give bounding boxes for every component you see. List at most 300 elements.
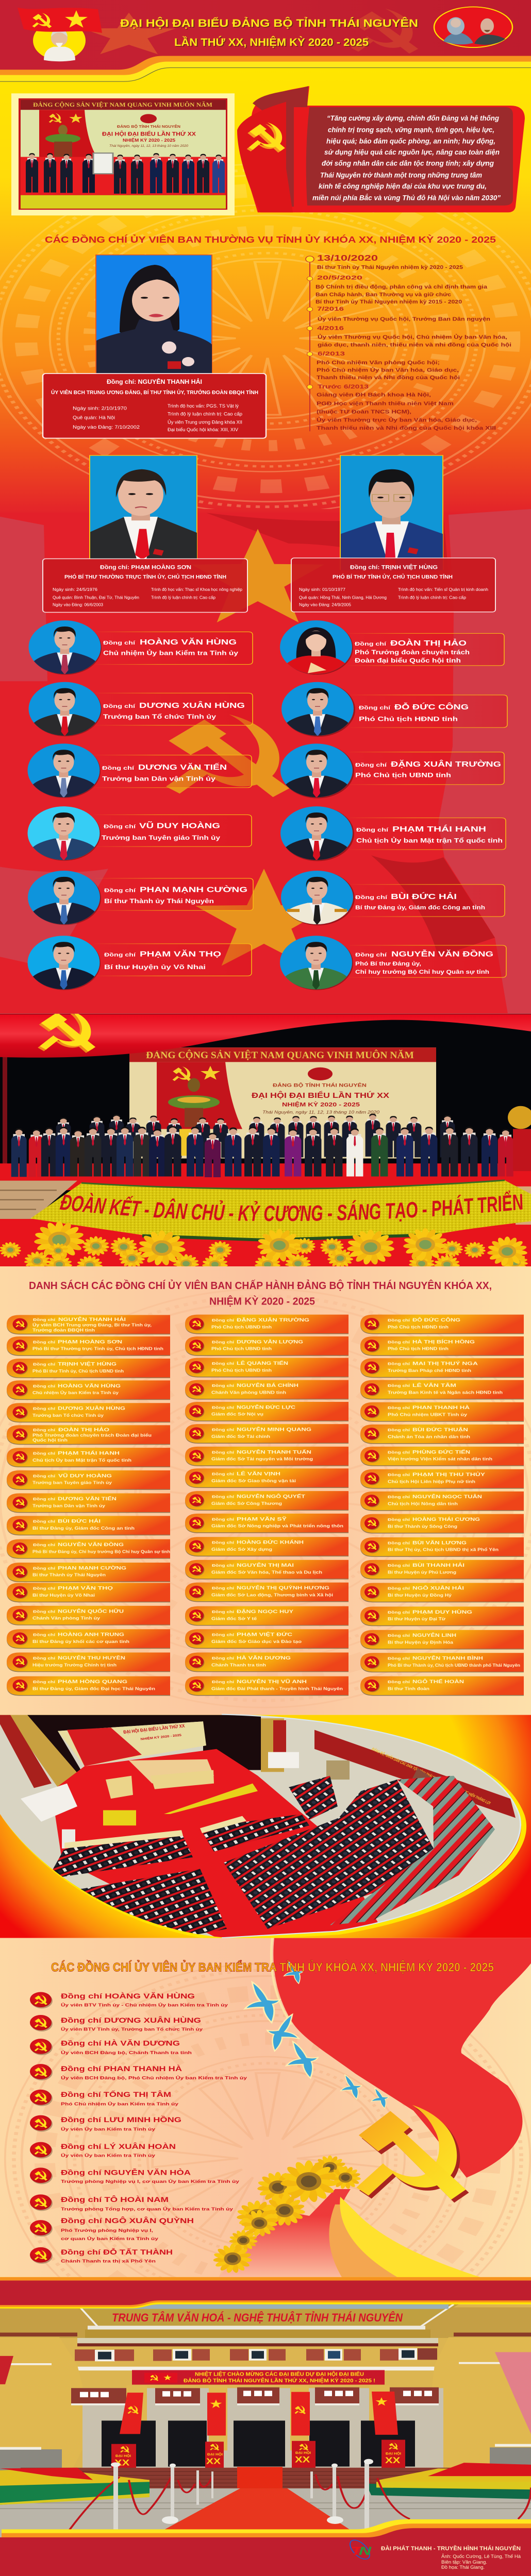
card: Pham Thai Hanh: PHẠM THÁI HANH: [58, 1450, 120, 1456]
card: Le Van Tam: LÊ VĂN TÂM: [412, 1383, 456, 1388]
welcome banner: ĐẢNG BỘ TỈNH THÁI NGUYÊN LẦN THỨ XX, NHIỆM KỲ 2020 - 2025 !: [184, 2378, 375, 2384]
card: Duong Xuan Hung: [7, 1403, 170, 1422]
decoration: sunflowers: [213, 2156, 361, 2273]
decoration: red drape: [273, 1938, 531, 2178]
column 1: [7, 1315, 170, 1696]
card: Pham Van Sy: Giám đốc Sở Nông nghiệp và Phát triển nông thôn: [211, 1524, 343, 1528]
heading: executive committee: [29, 1279, 492, 1307]
icon: station logo: [346, 2538, 374, 2562]
card: Pham Viet Duc: [185, 1629, 349, 1649]
column banners "Dai hoi XX": XX: [206, 2456, 221, 2466]
profile card: Trinh Viet Hung: [291, 558, 495, 612]
card: Nguyen Thanh Binh: NGUYỄN THANH BÌNH: [412, 1655, 483, 1661]
member: Duong Van Tien: Đồng chí: [102, 765, 135, 771]
card: Duong Van Luong: Đồng chí: [212, 1340, 235, 1344]
card: Pham Thi Thu Thuy: Đồng chí: [388, 1472, 410, 1477]
member: Nguyen Van Hoa: Trưởng phòng Nghiệp vụ I, cơ quan Ủy ban Kiểm tra Tỉnh ủy: [61, 2179, 239, 2184]
card: Nguyen Thi Quynh Huong: NGUYỄN THỊ QUỲNH HƯƠNG: [237, 1585, 329, 1591]
member: Nguyen Van Hoa: [30, 2167, 239, 2184]
card: Pham Van Sy: PHẠM VĂN SỸ: [237, 1516, 287, 1522]
card: Pham Thai Hanh: Chủ tịch Ủy ban Mặt trận Tổ quốc tỉnh: [32, 1458, 131, 1463]
card: Phan Thanh Ha: [360, 1402, 524, 1422]
card: Trinh Viet Hung: TRỊNH VIỆT HÙNG: [58, 1361, 117, 1367]
card: Hoang Van Hung: Đồng chí: [33, 1384, 56, 1388]
member: Doan Thi Hao: Đồng chí: [355, 641, 387, 647]
card: Phan Manh Cuong: Đồng chí: [33, 1566, 56, 1570]
profile card: Nguyen Thanh Hai: Trình độ lý luận chính trị: Cao cấp: [168, 412, 242, 417]
card: Nguyen Linh: NGUYỄN LINH: [412, 1633, 456, 1638]
card: Nguyen Thanh Tuan: [185, 1447, 349, 1466]
member: Do Duc Cong: ĐỖ ĐỨC CÔNG: [394, 702, 469, 711]
timeline: career of Nguyen Thanh Hai: Thanh thiếu niên và Nhi đồng của Quốc hội: [317, 375, 460, 381]
card: Pham Hoang Son: Đồng chí: [33, 1340, 56, 1344]
card: Nguyen Van Dong: NGUYỄN VĂN ĐỒNG: [58, 1542, 124, 1548]
card: Pham Hoang Son: PHẠM HOÀNG SƠN: [58, 1339, 122, 1345]
card: Nguyen Van Dong: [7, 1539, 170, 1559]
card: Nguyen Thanh Tuan: NGUYỄN THANH TUẤN: [237, 1449, 311, 1455]
card: Hoang Thai Cuong: [360, 1514, 524, 1534]
card: Bui Duc Hai: BÙI ĐỨC HẢI: [58, 1518, 101, 1524]
card: Nguyen Thu Huyen: [7, 1653, 170, 1672]
member: To Hoai Nam: Trưởng phòng Tổng hợp, cơ quan Ủy ban Kiểm tra Tỉnh ủy: [61, 2206, 233, 2212]
card: Nguyen Thanh Hai: [7, 1315, 170, 1334]
card: Bui Thanh Hai: [360, 1560, 524, 1580]
card: Nguyen Ba Chinh: [185, 1380, 349, 1400]
card: Mai Thi Thuy Nga: [360, 1358, 524, 1378]
title: congress name: LẦN THỨ XX, NHIỆM KỲ 2020 - 2025: [175, 36, 370, 49]
member: Bui Duc Hai: [280, 870, 505, 925]
card: Ngo The Hoan: Đồng chí: [388, 1680, 410, 1684]
member: Pham Thai Hanh: PHẠM THÁI HANH: [392, 824, 486, 834]
card: Bui Thanh Hai: BÙI THANH HẢI: [412, 1563, 464, 1568]
card: Nguyen Thi Mai: [185, 1560, 349, 1580]
card: Doan Thi Hao: ĐOÀN THỊ HẢO: [58, 1427, 110, 1433]
card: Nguyen Ngoc Tuan: Đồng chí: [388, 1495, 410, 1499]
tan column and red banner at left: [7, 1715, 98, 1797]
stage backdrop: ĐẢNG BỘ TỈNH THÁI NGUYÊN: [273, 1082, 367, 1088]
column shafts: [126, 2385, 390, 2450]
profile card: Nguyen Thanh Hai: Đồng chí: NGUYỄN THANH HẢI: [107, 378, 202, 385]
member: Duong Xuan Hung: Đồng chí DƯƠNG XUÂN HÙNG: [61, 2016, 201, 2024]
card: Dang Xuan Truong: ĐẶNG XUÂN TRƯỜNG: [237, 1317, 309, 1323]
card: Ha Thi Bich Hong: Phó Chủ tịch HĐND tỉnh: [388, 1347, 449, 1351]
card: Nguyen Linh: [360, 1630, 524, 1650]
card: Bui Duc Thuan: Đồng chí: [388, 1428, 410, 1432]
member: Do Duc Cong: Đồng chí: [359, 705, 391, 711]
stage backdrop: ĐẢNG CỘNG SẢN VIỆT NAM QUANG VINH MUÔN NĂM: [146, 1049, 414, 1060]
column banners "Dai hoi XX": ĐẠI HỘI: [295, 2451, 311, 2455]
timeline: career of Nguyen Thanh Hai: 4/2016: [317, 325, 344, 331]
member: Vu Duy Hoang: [27, 806, 252, 861]
red ribbon with hammer and sickle: [0, 1010, 531, 1058]
entrance doors: [102, 2420, 415, 2467]
timeline: career of Nguyen Thanh Hai: Ủy viên Thường trực Ủy ban Văn hóa, Giáo dục,: [317, 416, 477, 423]
card: Phung Duc Tien: Đồng chí: [388, 1450, 410, 1454]
panel: inspection committee: [0, 1938, 531, 2353]
profile card: Nguyen Thanh Hai: Ngày vào Đảng: 7/10/2002: [73, 425, 140, 430]
card: Phan Manh Cuong: [7, 1563, 170, 1582]
member: Duong Van Tien: [27, 743, 252, 798]
card: Hoang Van Hung: HOÀNG VĂN HÙNG: [58, 1383, 121, 1388]
portrait: Marx and Lenin medallion: [434, 7, 512, 47]
decoration: doves: [245, 1961, 389, 2108]
card: Duong Xuan Hung: Đồng chí: [33, 1406, 56, 1411]
card: Ha Thi Bich Hong: HÀ THỊ BÍCH HỒNG: [412, 1339, 475, 1345]
card: Mai Thi Thuy Nga: Trưởng Ban Pháp chế HĐND tỉnh: [388, 1368, 471, 1373]
panel: congress photo frame: [11, 93, 235, 215]
member: Hoang Van Hung: Đồng chí HOÀNG VĂN HÙNG: [61, 1992, 195, 2000]
card: Hoang Van Hung: Chủ nhiệm Ủy ban Kiểm tra Tỉnh ủy: [32, 1391, 119, 1395]
card: Nguyen Thanh Binh: [360, 1653, 524, 1672]
profile card: Nguyen Thanh Hai: Trình độ học vấn: PGS. TS Vật lý: [168, 404, 239, 409]
member: Phan Manh Cuong: Bí thư Thành ủy Thái Nguyên: [104, 897, 214, 905]
footer credits: Đồ họa: Thái Giang.: [441, 2565, 485, 2570]
timeline: career of Nguyen Thanh Hai: 7/2016: [317, 306, 344, 312]
profile card: Trinh Viet Hung: Đồng chí: TRỊNH VIỆT HÙNG: [350, 564, 438, 570]
card: Pham Van Tho: PHẠM VĂN THỌ: [58, 1585, 113, 1591]
card: Nguyen Thanh Hai: Đồng chí: [33, 1318, 56, 1322]
flower bed slogan: ĐOÀN KẾT - DÂN CHỦ - KỶ CƯƠNG - SÁNG TẠO - PHÁT TRIỂN: [59, 1190, 523, 1222]
member: Hoang Van Hung: [28, 620, 253, 675]
stage backdrop: Thái Nguyên, ngày 11, 12, 13 tháng 10 năm 2020: [262, 1110, 380, 1115]
red carpet: [157, 2467, 356, 2534]
welcome banner: NHIỆT LIỆT CHÀO MỪNG CÁC ĐẠI BIỂU DỰ ĐẠI HỘI ĐẠI BIỂU: [195, 2371, 364, 2377]
card: Nguyen Ngo Quyet: Đồng chí: [212, 1495, 235, 1499]
card: Nguyen Thi Mai: Đồng chí: [212, 1563, 235, 1568]
card: Phan Thanh Ha: Đồng chí: [388, 1405, 410, 1410]
profile card: Nguyen Thanh Hai: Ngày sinh: 2/10/1970: [73, 406, 127, 411]
icon: party flag with hammer sickle and star: [18, 8, 102, 33]
member: Duong Xuan Hung: Đồng chí: [103, 703, 136, 709]
card: Ha Van Duong: Đồng chí: [212, 1656, 235, 1660]
card: Pham Hong Quang: PHẠM HỒNG QUANG: [58, 1679, 127, 1685]
photo: congress hall from above in curved frame: NHIỆM KỲ 2020 - 2025: [140, 1733, 182, 1741]
decoration: hammer and sickle: [166, 715, 289, 797]
panel: executive committee list: [0, 1266, 531, 1715]
timeline: career of Nguyen Thanh Hai: Phó Chủ nhiệm Ủy ban Văn hóa, Giáo dục,: [317, 366, 459, 373]
timeline: career of Nguyen Thanh Hai: [306, 253, 511, 431]
card: Dang Ngoc Huy: ĐẶNG NGỌC HUY: [237, 1609, 294, 1615]
flower bed slogan: [30, 1179, 531, 1242]
decoration: faded star: [82, 13, 175, 54]
member: Bui Duc Hai: Bí thư Đảng ủy, Giám đốc Công an tỉnh: [355, 904, 485, 910]
photo: culture and arts centre building: [0, 2304, 531, 2538]
seating blocks: [47, 1836, 193, 1879]
card: Hoang Duc Khanh: HOÀNG ĐỨC KHÁNH: [237, 1539, 304, 1545]
sunflowers: [0, 1221, 528, 1275]
card: Nguyen Minh Quang: Giám đốc Sở Tài chính: [211, 1434, 270, 1439]
member: Duong Xuan Hung: [30, 2015, 203, 2032]
upper roof: [0, 2308, 531, 2338]
timeline: career of Nguyen Thanh Hai: Thanh thiếu niên và Nhi đồng của Quốc hội khóa XIII: [317, 425, 496, 431]
card: Doan Thi Hao: Đồng chí: [33, 1428, 56, 1432]
column banners "Dai hoi XX": XX: [385, 2456, 400, 2465]
panel: header banner: [0, 0, 531, 81]
card: Le Van Tam: Đồng chí: [388, 1383, 410, 1388]
card: Duong Xuan Hung: DƯƠNG XUÂN HÙNG: [58, 1405, 125, 1411]
member: Duong Van Tien: DƯƠNG VĂN TIẾN: [138, 762, 227, 771]
profile card: Nguyen Thanh Hai: Đại biểu Quốc hội khóa: XIII, XIV: [168, 428, 239, 433]
card: Nguyen Thanh Hai: NGUYỄN THANH HẢI: [58, 1317, 126, 1323]
member: Pham Van Tho: PHẠM VĂN THỌ: [140, 949, 221, 958]
member: Do Tat Thanh: [30, 2247, 173, 2264]
rope stanchions: [70, 2474, 531, 2530]
dark curtain top: [27, 1715, 261, 1799]
member: Phan Manh Cuong: PHAN MẠNH CƯỜNG: [140, 885, 247, 894]
timeline: career of Nguyen Thanh Hai: Ban Chấp hành, Ban Thường vụ và giữ chức: [316, 292, 451, 297]
red ground below flower bed: [0, 1219, 531, 1266]
card: Duong Xuan Hung: Trưởng ban Tổ chức Tỉnh ủy: [32, 1413, 104, 1418]
card: Dang Xuan Truong: Đồng chí: [212, 1318, 235, 1323]
timeline: career of Nguyen Thanh Hai: Ủy viên Thường vụ Quốc hội, Trưởng Ban Dân nguyện: [318, 315, 490, 322]
profile card: Pham Hoang Son: PHÓ BÍ THƯ THƯỜNG TRỰC TỈNH ỦY, CHỦ TỊCH HĐND TỈNH: [64, 573, 226, 580]
member: Ha Van Duong: [30, 2039, 192, 2055]
title: congress name: ĐẠI HỘI ĐẠI BIỂU ĐẢNG BỘ TỈNH THÁI NGUYÊN: [121, 17, 419, 30]
side pillars: [0, 2337, 531, 2480]
member: Bui Duc Hai: BÙI ĐỨC HẢI: [391, 892, 457, 901]
red stage floor: [0, 1163, 531, 1190]
card: Nguyen Ba Chinh: Đồng chí: [212, 1383, 235, 1388]
footer credits: Biên tập: Văn Giang.: [441, 2560, 487, 2565]
card: Nguyen Thi Vu Anh: [185, 1676, 349, 1696]
card: Nguyen Duc Luc: Đồng chí: [212, 1405, 235, 1410]
timeline: career of Nguyen Thanh Hai: Bí thư Tỉnh ủy Thái Nguyên nhiệm kỳ 2020 - 2025: [317, 264, 463, 270]
card: Nguyen Thanh Hai: Trưởng đoàn ĐBQH tỉnh: [32, 1328, 95, 1332]
member: Do Tat Thanh: Chánh Thanh tra thị xã Phổ Yên: [61, 2259, 156, 2264]
balconies: [71, 2387, 439, 2403]
timeline: career of Nguyen Thanh Hai: Bí thư Tỉnh ủy Thái Nguyên nhiệm kỳ 2015 - 2020: [316, 299, 462, 305]
card: Bui Van Luong: Bí thư Thị ủy, Chủ tịch UBND thị xã Phổ Yên: [388, 1548, 499, 1552]
member: Do Duc Cong: Phó Chủ tịch HĐND tỉnh: [359, 716, 458, 722]
card: Pham Thai Hanh: Đồng chí: [33, 1451, 56, 1455]
card: Pham Van Tho: Đồng chí: [33, 1586, 56, 1590]
member: Hoang Van Hung: [30, 1992, 228, 2008]
member: Nguyen Van Dong: Chỉ huy trưởng Bộ Chỉ huy Quân sự tỉnh: [355, 969, 489, 975]
card: Nguyen Thanh Tuan: Đồng chí: [212, 1450, 235, 1454]
upper wall panels and windows: [2, 2340, 531, 2361]
card: Nguyen Ngoc Tuan: [360, 1492, 524, 1511]
member: Dang Xuan Truong: Đồng chí: [355, 762, 387, 768]
member: Pham Van Tho: Đồng chí: [104, 952, 136, 958]
card: Dang Ngoc Huy: Đồng chí: [212, 1609, 235, 1614]
column banners "Dai hoi XX": ĐẠI HỘI: [115, 2454, 131, 2458]
card: Le Van Vinh: Giám đốc Sở Giao thông vận tải: [211, 1479, 296, 1483]
card: Duong Van Tien: Trưởng ban Dân vận Tỉnh ủy: [32, 1504, 106, 1508]
card: Le Quang Tien: LÊ QUANG TIẾN: [237, 1361, 288, 1366]
panel: congress photo frame: ĐẠI HỘI ĐẠI BIỂU LẦN THỨ XX: [102, 131, 196, 137]
stage backdrop: ĐẠI HỘI ĐẠI BIỂU LẦN THỨ XX: [252, 1091, 389, 1100]
card: Nguyen Ngoc Tuan: Chủ tịch Hội Nông dân tỉnh: [388, 1502, 458, 1506]
white band: [70, 2367, 443, 2370]
profile card: Trinh Viet Hung: Ngày vào Đảng: 24/9/2005: [299, 603, 351, 607]
stage backdrop: [129, 1047, 436, 1159]
member: Ngo Xuan Quynh: Phó Trưởng phòng Nghiệp vụ I,: [61, 2228, 153, 2233]
card: Nguyen Quoc Huu: Chánh Văn phòng Tỉnh ủy: [32, 1616, 101, 1620]
profile card: Trinh Viet Hung: Quê quán: Hồng Thái, Ninh Giang, Hải Dương: [299, 595, 387, 600]
panel: section divider above building: [0, 2277, 531, 2309]
welcome banner: [132, 2370, 385, 2385]
card: Pham Viet Duc: Giám đốc Sở Giáo dục và Đào tạo: [211, 1639, 302, 1644]
profile card: Nguyen Thanh Hai: Quê quán: Hà Nội: [73, 415, 115, 420]
member: Do Duc Cong: [280, 681, 507, 737]
member: Luu Minh Hong: Đồng chí LƯU MINH HỒNG: [61, 2115, 181, 2124]
quote panel: [306, 107, 513, 206]
member: Nguyen Van Dong: [279, 935, 506, 990]
card: Ha Thi Bich Hong: [360, 1336, 524, 1356]
card: Bui Duc Thuan: BÙI ĐỨC THUẬN: [412, 1427, 468, 1433]
profile card: Trinh Viet Hung: PHÓ BÍ THƯ TỈNH ỦY, CHỦ TỊCH UBND TỈNH: [333, 573, 453, 580]
member: Doan Thi Hao: ĐOÀN THỊ HẢO: [390, 638, 467, 648]
card: Nguyen Thi Vu Anh: Giám đốc Đài Phát thanh - Truyền hình Thái Nguyên: [211, 1687, 343, 1691]
card: Le Van Vinh: LÊ VĂN VỊNH: [237, 1471, 280, 1477]
card: Ngo Xuan Hai: Bí thư Huyện ủy Đồng Hỷ: [388, 1593, 452, 1598]
card: Pham Thi Thu Thuy: [360, 1469, 524, 1489]
card: Nguyen Thanh Hai: Ủy viên BCH Trung ương Đảng, Bí thư Tỉnh ủy,: [32, 1323, 152, 1327]
decoration: faded hammer and sickle: [351, 9, 418, 54]
heading: executive committee: NHIỆM KỲ 2020 - 2025: [209, 1295, 315, 1307]
member: Tong Thi Tam: Đồng chí TỐNG THỊ TÂM: [61, 2090, 171, 2098]
member: Doan Thi Hao: Phó Trưởng đoàn chuyên trách: [355, 649, 470, 656]
card: Mai Thi Thuy Nga: MAI THỊ THUÝ NGA: [412, 1361, 478, 1366]
card: Ha Van Duong: [185, 1653, 349, 1672]
member: Nguyen Van Dong: NGUYỄN VĂN ĐỒNG: [391, 949, 493, 958]
card: Phung Duc Tien: PHÙNG ĐỨC TIẾN: [412, 1449, 470, 1455]
card: Nguyen Duc Luc: [185, 1402, 349, 1421]
photo: delegates on stage with flower bed: [0, 1014, 531, 1266]
card: Ngo The Hoan: Bí thư Tỉnh đoàn: [388, 1687, 429, 1691]
card: Nguyen Thi Mai: Giám đốc Sở Văn hóa, Thể thao và Du lịch: [211, 1570, 322, 1574]
card: Nguyen Van Dong: Đồng chí: [33, 1543, 56, 1547]
icon: station logo: N: [359, 2545, 372, 2557]
card: Bui Van Luong: [360, 1537, 524, 1557]
card: Vu Duy Hoang: VŨ DUY HOÀNG: [58, 1473, 112, 1479]
card: Vu Duy Hoang: Đồng chí: [33, 1474, 56, 1478]
card: Hoang Duc Khanh: [185, 1537, 349, 1556]
member: Luu Minh Hong: Ủy viên Ủy ban Kiểm tra Tỉnh ủy: [61, 2126, 155, 2132]
member: Pham Thai Hanh: Đồng chí: [356, 827, 389, 833]
card: Ngo Xuan Hai: Đồng chí: [388, 1586, 410, 1590]
member: Nguyen Van Dong: Đồng chí: [355, 952, 387, 958]
member: Pham Van Tho: [27, 935, 252, 990]
member: Hoang Van Hung: HOÀNG VĂN HÙNG: [140, 637, 237, 646]
icon: hammer and sickle: [247, 122, 285, 152]
delegates group: [11, 1106, 531, 1177]
card: Bui Thanh Hai: Bí thư Huyện ủy Phú Lương: [388, 1570, 456, 1574]
icon: large 3D hammer and sickle: [356, 2105, 469, 2202]
member: Tong Thi Tam: Phó Chủ nhiệm Ủy ban Kiểm tra Tỉnh ủy: [61, 2101, 178, 2107]
column 3: [360, 1315, 524, 1696]
member: Tong Thi Tam: [30, 2090, 178, 2107]
card: Le Quang Tien: [185, 1358, 349, 1377]
panel: congress photo frame: Thái Nguyên, ngày 11, 12, 13 tháng 10 năm 2020: [109, 145, 188, 148]
card: Bui Thanh Hai: Đồng chí: [388, 1563, 410, 1568]
card: Bui Duc Hai: Đồng chí: [33, 1519, 56, 1523]
card: Pham Viet Duc: PHẠM VIỆT ĐỨC: [237, 1632, 292, 1637]
card: Nguyen Minh Quang: NGUYỄN MINH QUANG: [237, 1427, 311, 1432]
card: Pham Hong Quang: Đồng chí: [33, 1680, 56, 1684]
card: Vu Duy Hoang: Trưởng ban Tuyên giáo Tỉnh ủy: [32, 1481, 112, 1485]
profile card: Pham Hoang Son: Trình độ lý luận chính trị: Cao cấp: [151, 595, 215, 600]
card: Do Duc Cong: Phó Chủ tịch HĐND tỉnh: [388, 1325, 449, 1329]
card: Bui Duc Thuan: Chánh án Tòa án nhân dân tỉnh: [388, 1435, 470, 1439]
timeline: career of Nguyen Thanh Hai: Bộ Chính trị điều động, phân công và chỉ định tham gia: [316, 284, 487, 290]
column banners "Dai hoi XX": [111, 2440, 405, 2476]
member: Luu Minh Hong: [30, 2115, 181, 2132]
title: congress name: [120, 16, 419, 49]
card: Ngo Xuan Hai: [360, 1583, 524, 1602]
decoration: big star: [191, 529, 324, 622]
member: Dang Xuan Truong: ĐẶNG XUÂN TRƯỜNG: [391, 759, 501, 768]
card: Pham Duy Hung: [360, 1606, 524, 1626]
card: Ngo Xuan Hai: NGÔ XUÂN HẢI: [412, 1585, 464, 1591]
card: Ngo The Hoan: [360, 1676, 524, 1696]
member: Ngo Xuan Quynh: cơ quan Ủy ban Kiểm tra Tỉnh ủy: [61, 2235, 158, 2241]
stairs: [0, 1181, 77, 1221]
member: Phan Thanh Ha: Đồng chí PHAN THANH HÀ: [61, 2065, 182, 2073]
card: Duong Van Luong: Phó Chủ tịch UBND tỉnh: [211, 1347, 272, 1351]
member: Hoang Van Hung: Chủ nhiệm Ủy ban Kiểm tra Tỉnh ủy: [103, 649, 238, 656]
member: Duong Xuan Hung: [28, 681, 253, 736]
card: Dang Xuan Truong: [185, 1315, 349, 1334]
card: Vu Duy Hoang: [7, 1470, 170, 1490]
portrait: Trinh Viet Hung: [340, 455, 443, 570]
member: Ly Xuan Hoan: Ủy viên Ủy ban Kiểm tra Tỉnh ủy: [61, 2153, 155, 2158]
member: Pham Van Tho: Bí thư Huyện ủy Võ Nhai: [104, 963, 206, 970]
card: Trinh Viet Hung: Phó Bí thư Tỉnh ủy, Chủ tịch UBND tỉnh: [32, 1369, 124, 1373]
card: Le Van Vinh: [185, 1468, 349, 1488]
pavement: [0, 2488, 531, 2538]
card: Nguyen Duc Luc: NGUYỄN ĐỨC LỰC: [237, 1404, 295, 1410]
card: Nguyen Ngoc Tuan: NGUYỄN NGỌC TUÂN: [412, 1494, 482, 1500]
card: Pham Duy Hung: Bí thư Huyện ủy Đại Từ: [388, 1617, 445, 1621]
member: Dang Xuan Truong: Phó Chủ tịch UBND tỉnh: [355, 772, 451, 778]
card: Do Duc Cong: [360, 1315, 524, 1334]
card: Pham Thi Thu Thuy: Chủ tịch Hội Liên hiệp Phụ nữ tỉnh: [388, 1480, 475, 1484]
profile card: Pham Hoang Son: Đồng chí: PHẠM HOÀNG SƠN: [100, 564, 191, 570]
card: Nguyen Minh Quang: Đồng chí: [212, 1428, 235, 1432]
card: Bui Duc Thuan: [360, 1425, 524, 1444]
member: Nguyen Van Dong: Phó Bí thư Đảng ủy,: [355, 960, 421, 967]
member: To Hoai Nam: Đồng chí TÔ HOÀI NAM: [61, 2196, 169, 2204]
card: Nguyen Thi Quynh Huong: [185, 1583, 349, 1602]
stage tables: [129, 1759, 214, 1784]
card: Do Duc Cong: Đồng chí: [388, 1318, 410, 1323]
card: Pham Duy Hung: Đồng chí: [388, 1610, 410, 1614]
profile card: Pham Hoang Son: Trình độ học vấn: Thạc sĩ Khoa học nông nghiệp: [151, 587, 242, 592]
profile card: Pham Hoang Son: [43, 559, 247, 613]
member: Phan Manh Cuong: [27, 870, 253, 925]
card: Nguyen Ba Chinh: NGUYỄN BÁ CHÍNH: [237, 1383, 298, 1388]
card: Nguyen Thanh Binh: Đồng chí: [388, 1656, 410, 1660]
card: Phung Duc Tien: Viện trưởng Viện Kiểm sát nhân dân tỉnh: [388, 1457, 492, 1461]
card: Bui Duc Hai: [7, 1516, 170, 1535]
side plinths: [0, 2449, 62, 2476]
card: Dang Ngoc Huy: [185, 1606, 349, 1626]
portrait: Ho Chi Minh medallion: [33, 21, 86, 61]
card: Hoang Anh Trung: HOÀNG ANH TRUNG: [58, 1632, 124, 1637]
card: Hoang Duc Khanh: Đồng chí: [212, 1540, 235, 1545]
card: Duong Van Tien: DƯƠNG VĂN TIẾN: [58, 1496, 117, 1501]
profile card: Nguyen Thanh Hai: ỦY VIÊN BCH TRUNG ƯƠNG ĐẢNG, BÍ THƯ TỈNH ỦY, TRƯỞNG ĐOÀN ĐBQH TỈNH: [51, 389, 258, 396]
card: Pham Hoang Son: [7, 1336, 170, 1356]
card: Doan Thi Hao: Quốc hội tỉnh: [32, 1438, 68, 1443]
member: Hoang Van Hung: Ủy viên BTV Tỉnh ủy - Chủ nhiệm Ủy ban Kiểm tra Tỉnh ủy: [61, 2002, 228, 2008]
card: Hoang Thai Cuong: HOÀNG THÁI CƯƠNG: [412, 1517, 480, 1522]
photo: congress hall from above in curved frame: [0, 1715, 531, 1941]
photo: congress hall from above in curved frame: ĐẠI HỘI ĐẠI BIỂU LẦN THỨ XX: [123, 1723, 185, 1735]
card: Le Quang Tien: Đồng chí: [212, 1361, 235, 1366]
yellow flower strip: [164, 1784, 258, 1814]
